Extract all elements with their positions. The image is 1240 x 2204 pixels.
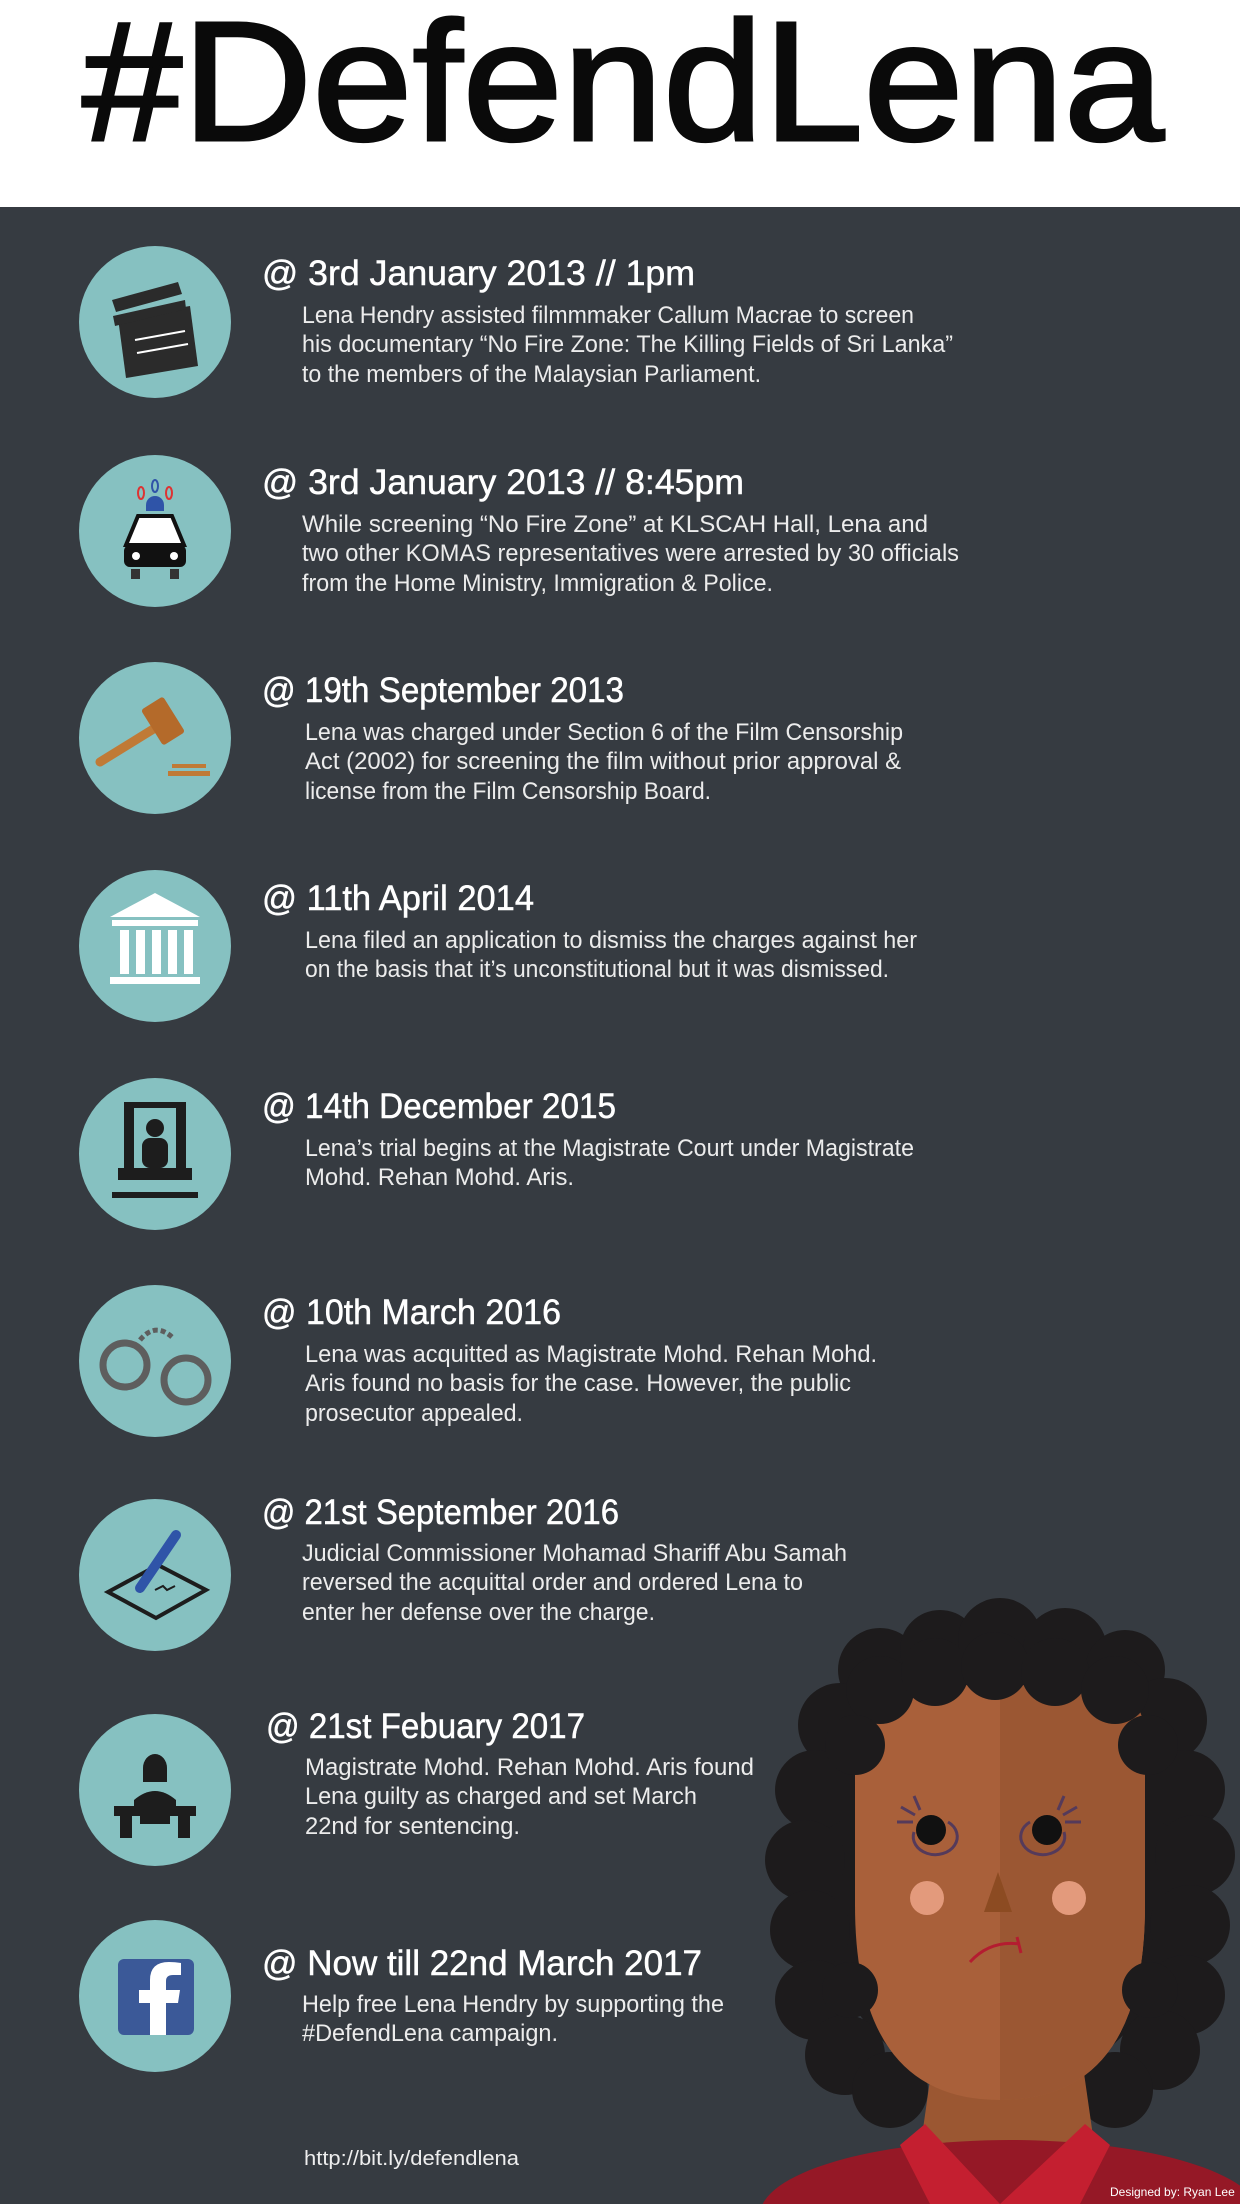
- icon: clapperboard: [79, 246, 231, 398]
- event 4: Lena filed an application to dismiss the charges against her: [305, 927, 917, 954]
- event 7: reversed the acquittal order and ordered Lena to: [302, 1569, 803, 1596]
- cheeks, nose, mouth: [910, 1881, 944, 1915]
- icon: gavel: [79, 662, 231, 814]
- event 3: Lena was charged under Section 6 of the Film Censorship: [305, 719, 903, 746]
- event 5: Mohd. Rehan Mohd. Aris.: [305, 1164, 574, 1191]
- event 7: [79, 1493, 847, 1651]
- event 9: #DefendLena campaign.: [302, 2020, 558, 2047]
- icon: witness stand: [79, 1078, 231, 1230]
- event 8: Lena guilty as charged and set March: [305, 1783, 697, 1810]
- hair bangs: [822, 1632, 1178, 2018]
- event 1: to the members of the Malaysian Parliament.: [302, 361, 761, 388]
- icon: person at desk: [79, 1714, 231, 1866]
- event 7: Judicial Commissioner Mohamad Shariff Abu Samah: [302, 1540, 847, 1567]
- event 6: Lena was acquitted as Magistrate Mohd. Rehan Mohd.: [305, 1341, 877, 1368]
- credit: Designed by: Ryan Lee: [1110, 2185, 1235, 2199]
- event 1: Lena Hendry assisted filmmmaker Callum Macrae to screen: [302, 302, 914, 329]
- hair: [765, 1598, 1235, 2128]
- event 6: @ 10th March 2016: [262, 1293, 561, 1332]
- event 3: license from the Film Censorship Board.: [305, 778, 711, 805]
- event 4: @ 11th April 2014: [262, 879, 534, 918]
- event 6: prosecutor appealed.: [305, 1400, 523, 1427]
- event 8: [79, 1707, 754, 1866]
- icon: courthouse: [79, 870, 231, 1022]
- event 3: @ 19th September 2013: [262, 671, 624, 710]
- event 9: Help free Lena Hendry by supporting the: [302, 1991, 724, 2018]
- event 2: @ 3rd January 2013 // 8:45pm: [262, 463, 744, 502]
- event 5: @ 14th December 2015: [262, 1087, 616, 1126]
- event 3: [79, 662, 903, 814]
- event 6: Aris found no basis for the case. However, the public: [305, 1370, 851, 1397]
- event 2: While screening “No Fire Zone” at KLSCAH Hall, Lena and: [302, 511, 928, 538]
- eyes: [897, 1796, 1081, 1855]
- event 8: Magistrate Mohd. Rehan Mohd. Aris found: [305, 1754, 754, 1781]
- event 5: Lena’s trial begins at the Magistrate Court under Magistrate: [305, 1135, 914, 1162]
- shirt: [760, 2140, 1240, 2204]
- icon: facebook: [79, 1920, 231, 2072]
- event 2: from the Home Ministry, Immigration & Police.: [302, 570, 773, 597]
- event 3: Act (2002) for screening the film without prior approval &: [305, 748, 901, 775]
- event 2: two other KOMAS representatives were arrested by 30 officials: [302, 540, 959, 567]
- face: [855, 1685, 1145, 2100]
- event 7: @ 21st September 2016: [262, 1493, 619, 1532]
- event 1: @ 3rd January 2013 // 1pm: [262, 254, 695, 293]
- event 1: his documentary “No Fire Zone: The Killing Fields of Sri Lanka”: [302, 331, 953, 358]
- neck: [920, 2010, 1095, 2150]
- event 5: [79, 1078, 914, 1230]
- event 4: [79, 870, 917, 1022]
- event 8: @ 21st Febuary 2017: [266, 1707, 585, 1746]
- icon: pen signing: [79, 1499, 231, 1651]
- event 2: [79, 455, 959, 607]
- illustration: Lena portrait: [760, 1598, 1240, 2204]
- icon: handcuffs: [79, 1285, 231, 1437]
- event 7: enter her defense over the charge.: [302, 1599, 655, 1626]
- icon: police car: [79, 455, 231, 607]
- link text: http://bit.ly/defendlena: [304, 2148, 520, 2170]
- event 6: [79, 1285, 877, 1437]
- event 8: 22nd for sentencing.: [305, 1813, 520, 1840]
- event 1: [79, 246, 953, 398]
- event 4: on the basis that it’s unconstitutional but it was dismissed.: [305, 956, 889, 983]
- event 9: [79, 1920, 724, 2072]
- event 9: @ Now till 22nd March 2017: [262, 1944, 702, 1983]
